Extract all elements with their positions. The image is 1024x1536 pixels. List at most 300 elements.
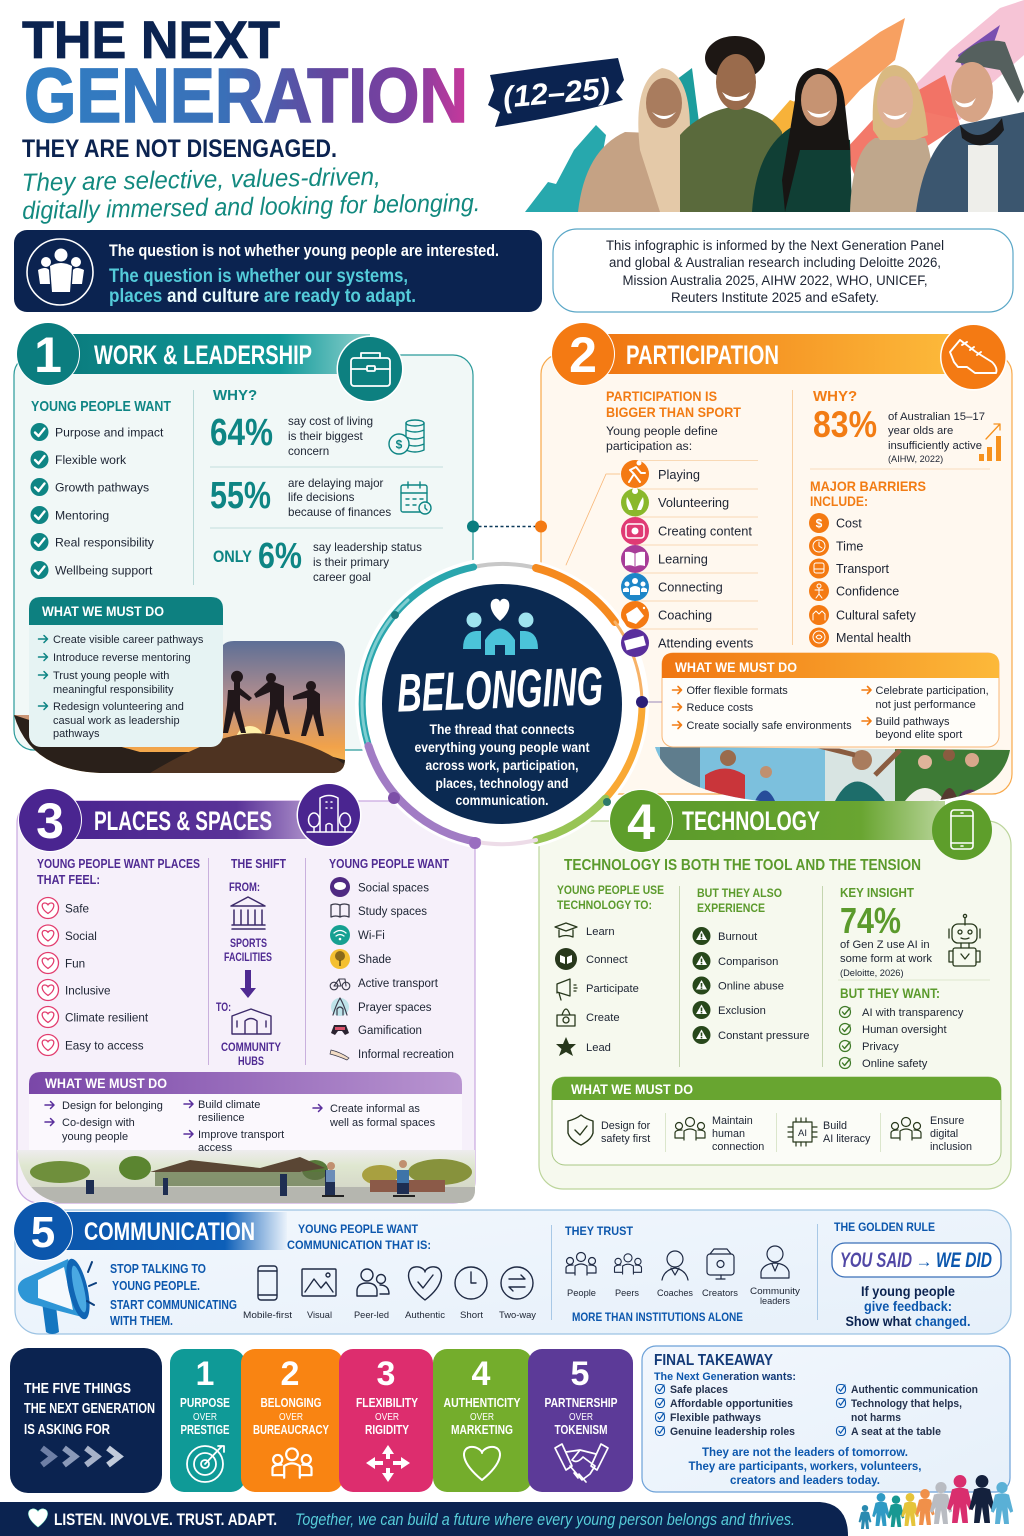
card 4: authenticity: OVER	[470, 1411, 494, 1423]
list: places that feel	[37, 856, 200, 1056]
what we must do: technology: safety first	[601, 1133, 650, 1145]
list: young people want spaces: Prayer spaces	[358, 1002, 432, 1014]
key insight: (Deloitte, 2026)	[840, 968, 904, 978]
what we must do: work: WHAT WE MUST DO	[42, 603, 164, 619]
they trust: Community	[750, 1286, 800, 1297]
final takeaway: Flexible pathways	[670, 1412, 761, 1424]
card 1: purpose: OVER	[193, 1411, 217, 1423]
sources box: Reuters Institute 2025 and eSafety.	[671, 290, 879, 305]
statistics: why	[210, 387, 443, 584]
golden rule	[832, 1220, 1001, 1329]
icon: chevrons	[42, 1448, 119, 1465]
what we must do: work: casual work as leadership	[53, 715, 180, 727]
list: places that feel: Fun	[65, 958, 85, 970]
card 3: flexibility: 3	[377, 1355, 395, 1393]
title	[22, 11, 468, 139]
what we must do: technology: connection	[712, 1141, 764, 1153]
list: also experience: Comparison	[718, 956, 778, 968]
key insight: 74%	[840, 900, 901, 941]
list: use technology to: Connect	[586, 954, 629, 966]
footer banner	[0, 1502, 848, 1536]
golden rule: give feedback:	[864, 1299, 952, 1314]
card 5: partnership: OVER	[569, 1411, 593, 1423]
ribbon header	[551, 322, 1007, 390]
final takeaway	[642, 1346, 1010, 1492]
ribbon header	[16, 322, 404, 402]
card 1: purpose: PRESTIGE	[180, 1422, 230, 1437]
question banner: places and culture are ready to adapt.	[109, 286, 416, 307]
list: also experience	[692, 886, 809, 1044]
what we must do: work: pathways	[53, 728, 100, 740]
what we must do: participation	[662, 653, 999, 747]
core circle: The thread that connects	[430, 722, 575, 737]
ribbon header: 3	[36, 793, 64, 849]
list: places that feel: THAT FEEL:	[37, 872, 100, 887]
card 5: partnership: PARTNERSHIP	[544, 1395, 618, 1410]
key insight: Human oversight	[862, 1024, 947, 1036]
they trust: Peers	[615, 1288, 639, 1299]
icon: digital inclusion	[891, 1118, 921, 1140]
what we must do: places: Create informal as	[330, 1103, 420, 1115]
what we must do: places: resilience	[198, 1112, 244, 1124]
statistics: why: is their primary	[313, 556, 389, 569]
what we must do: places: Co-design with	[62, 1117, 135, 1129]
what we must do: technology: human	[712, 1128, 745, 1140]
column: the shift: FROM:	[229, 882, 260, 894]
card 2: belonging: BELONGING	[260, 1395, 322, 1410]
column: bigger than sport	[566, 388, 758, 629]
key insight: KEY INSIGHT	[840, 886, 914, 900]
list: also experience: BUT THEY ALSO	[697, 886, 782, 900]
column: bigger than sport: Connecting	[658, 580, 723, 594]
ribbon header	[18, 782, 362, 852]
what we must do: technology: AI literacy	[823, 1133, 871, 1145]
tagline: They are selective, values-driven,	[22, 163, 381, 197]
column: the shift: HUBS	[238, 1056, 264, 1068]
communication qualities	[243, 1222, 536, 1321]
messaging: WITH THEM.	[110, 1314, 173, 1328]
column: bigger than sport: Learning	[658, 552, 708, 566]
icon: volunteering	[621, 488, 649, 516]
list: also experience: Exclusion	[718, 1005, 766, 1017]
question banner: The question is not whether young people are interested.	[109, 241, 499, 260]
list: young people want	[30, 398, 171, 579]
list: use technology to: Create	[586, 1012, 620, 1024]
messaging: START COMMUNICATING	[110, 1298, 237, 1312]
what we must do: places: access	[198, 1142, 233, 1154]
card 2: belonging: OVER	[279, 1411, 303, 1423]
list: major barriers	[809, 478, 926, 648]
column: the shift	[216, 857, 286, 1068]
list: use technology to	[555, 883, 664, 1056]
list: major barriers: INCLUDE:	[810, 493, 868, 509]
statistics: why: insufficiently active	[888, 440, 982, 452]
ribbon header: 5	[31, 1208, 55, 1257]
messaging	[110, 1262, 237, 1328]
they trust	[565, 1224, 800, 1324]
icon: coins: $	[396, 438, 403, 452]
card 5: partnership: TOKENISM	[554, 1422, 608, 1437]
footer banner: Together, we can build a future where every young person belongs and thrives.	[295, 1510, 795, 1529]
what we must do: technology: WHAT WE MUST DO	[571, 1081, 693, 1097]
final takeaway: Affordable opportunities	[670, 1398, 793, 1410]
what we must do: participation: WHAT WE MUST DO	[675, 659, 797, 675]
person 1 hijab	[578, 132, 660, 212]
list: major barriers: Transport	[836, 562, 890, 576]
photo: young people being active	[655, 745, 1010, 801]
they trust: THEY TRUST	[565, 1224, 634, 1238]
title: GENERATION	[24, 53, 468, 139]
what we must do: places: Design for belonging	[62, 1100, 163, 1112]
column: bigger than sport: BIGGER THAN SPORT	[606, 404, 741, 420]
statistics: why: career goal	[313, 571, 371, 584]
key insight	[838, 886, 990, 1070]
list: also experience: Burnout	[718, 931, 758, 943]
communication qualities: Authentic	[405, 1310, 445, 1321]
what we must do: participation: Offer flexible formats	[686, 685, 788, 697]
what we must do: technology: digital	[930, 1128, 958, 1140]
photo: silhouettes on a hill at sunset	[14, 641, 345, 773]
person 4 blonde	[850, 138, 933, 212]
list: places that feel: Inclusive	[65, 984, 110, 998]
key insight: Privacy	[862, 1041, 899, 1053]
what we must do: work: Trust young people with	[53, 670, 169, 682]
golden rule: →	[916, 1252, 932, 1271]
they trust: MORE THAN INSTITUTIONS ALONE	[572, 1310, 743, 1324]
icon: coins	[389, 420, 424, 454]
key insight: AI with transparency	[862, 1007, 964, 1019]
final takeaway: They are participants, workers, volunteers,	[688, 1459, 922, 1473]
final takeaway: Safe places	[670, 1384, 728, 1396]
statistics: why: 83%	[813, 404, 877, 445]
belonging hub	[355, 557, 662, 851]
list: major barriers: Cultural safety	[836, 608, 917, 622]
column: bigger than sport: PARTICIPATION IS	[606, 388, 717, 404]
list: young people want: YOUNG PEOPLE WANT	[31, 398, 171, 415]
statistics: why: of Australian 15–17	[888, 411, 985, 423]
what we must do: places: Build climate	[198, 1099, 260, 1111]
list: young people want: Wellbeing support	[55, 564, 153, 578]
five things panel: THE NEXT GENERATION	[24, 1400, 155, 1417]
statistics: why: is their biggest	[288, 430, 364, 443]
list: young people want spaces: Study spaces	[358, 906, 427, 918]
card 3: flexibility: FLEXIBILITY	[356, 1395, 418, 1410]
final takeaway: Technology that helps,	[851, 1398, 962, 1410]
what we must do: work: Create visible career pathways	[53, 634, 204, 646]
communication qualities: Visual	[307, 1310, 332, 1321]
list: places that feel: Climate resilient	[65, 1012, 149, 1024]
statistics: why	[810, 388, 1001, 469]
final takeaway: The Next Generation wants:	[654, 1371, 796, 1383]
core circle: places, technology and	[436, 776, 568, 791]
statistics: why: WHY?	[213, 387, 257, 404]
core circle: BELONGING	[396, 656, 604, 724]
list: major barriers: Cost	[836, 516, 862, 530]
list: major barriers: MAJOR BARRIERS	[810, 478, 926, 494]
panel: participation	[541, 322, 1012, 801]
statistics: why: concern	[288, 445, 329, 458]
list: use technology to: Participate	[586, 983, 639, 995]
sources box	[553, 229, 1013, 312]
communication qualities: Short	[460, 1310, 483, 1321]
photo: community park	[17, 1145, 475, 1203]
card 4: authenticity: MARKETING	[451, 1422, 513, 1437]
age range badge: (12–25)	[502, 72, 611, 115]
golden rule: THE GOLDEN RULE	[834, 1220, 935, 1234]
column: bigger than sport: Playing	[658, 467, 700, 482]
ribbon header: COMMUNICATION	[84, 1218, 255, 1246]
final takeaway: FINAL TAKEAWAY	[654, 1352, 774, 1369]
card 4: authenticity: AUTHENTICITY	[444, 1395, 521, 1410]
age range badge	[488, 58, 624, 127]
card 3: flexibility: RIGIDITY	[365, 1422, 409, 1437]
list: major barriers: Mental health	[836, 631, 911, 645]
subtitle: THEY ARE NOT DISENGAGED.	[22, 135, 337, 163]
list: use technology to: Lead	[586, 1042, 611, 1054]
communication qualities: COMMUNICATION THAT IS:	[287, 1238, 431, 1252]
list: use technology to: YOUNG PEOPLE USE	[557, 883, 664, 897]
they trust: Coaches	[657, 1288, 693, 1299]
list: places that feel: Easy to access	[65, 1040, 144, 1052]
what we must do: participation: Celebrate participation,	[876, 685, 989, 697]
what we must do: work: meaningful responsibility	[53, 684, 174, 696]
icon: people and heart	[463, 599, 538, 655]
statistics: why: ONLY	[213, 547, 253, 566]
they trust: Creators	[702, 1288, 738, 1299]
tagline	[22, 161, 480, 225]
list: young people want: Purpose and impact	[55, 426, 164, 440]
what we must do: technology: Ensure	[930, 1115, 964, 1127]
list: young people want spaces: Informal recreation	[358, 1049, 454, 1061]
list: major barriers: Confidence	[836, 584, 899, 598]
list: young people want spaces: Gamification	[358, 1025, 422, 1037]
card 2: belonging	[241, 1349, 343, 1492]
core circle: everything young people want	[414, 740, 590, 755]
statistics: why: life decisions	[288, 491, 355, 504]
ribbon header	[609, 789, 992, 860]
header photo: five young people with paint strokes	[525, 0, 1024, 212]
list: places that feel: Safe	[65, 902, 89, 916]
list: young people want spaces: Active transport	[358, 978, 439, 990]
subheading: TECHNOLOGY IS BOTH THE TOOL AND THE TENSION	[564, 857, 921, 874]
person 3	[752, 128, 852, 212]
panel: communication	[13, 1201, 1011, 1334]
five things panel	[10, 1348, 162, 1493]
communication qualities: Peer-led	[354, 1310, 389, 1321]
what we must do: participation: not just performance	[876, 699, 976, 711]
icon: attending events: Attending events	[658, 636, 753, 650]
column: bigger than sport: Coaching	[658, 608, 712, 622]
statistics: why: year olds are	[888, 425, 953, 437]
statistics: why: are delaying major	[288, 477, 384, 490]
panel: work and leadership	[14, 322, 473, 773]
statistics: why: WHY?	[813, 388, 857, 405]
what we must do: technology	[552, 1077, 1001, 1165]
list: places that feel: Social	[65, 930, 97, 943]
final takeaway: A seat at the table	[851, 1426, 941, 1438]
what we must do: technology: Design for	[601, 1120, 651, 1132]
statistics: why: say leadership status	[313, 541, 422, 554]
what we must do: places	[29, 1072, 462, 1154]
they trust: leaders	[760, 1296, 790, 1307]
final takeaway: Authentic communication	[851, 1384, 978, 1396]
column: the shift: COMMUNITY	[221, 1042, 281, 1054]
key insight: Online safety	[862, 1058, 928, 1070]
card 3: flexibility	[339, 1349, 433, 1492]
what we must do: participation: Create socially safe environments	[686, 720, 852, 732]
list: also experience: Constant pressure	[718, 1030, 809, 1042]
what we must do: participation: beyond elite sport	[876, 729, 962, 741]
what we must do: work	[29, 597, 223, 747]
what we must do: participation: Reduce costs	[686, 702, 754, 714]
icon: connecting	[621, 573, 649, 601]
title: THE NEXT	[22, 11, 280, 70]
final takeaway: They are not the leaders of tomorrow.	[702, 1445, 908, 1459]
card 5: partnership: 5	[571, 1355, 589, 1393]
what we must do: places: WHAT WE MUST DO	[45, 1075, 167, 1091]
what we must do: places: young people	[62, 1131, 128, 1143]
card 1: purpose: 1	[196, 1355, 214, 1393]
list: young people want spaces: Social spaces	[358, 882, 429, 894]
icon: calendar	[401, 482, 431, 514]
icon: bar chart with arrow	[979, 424, 1001, 461]
key insight: of Gen Z use AI in	[840, 939, 930, 951]
final takeaway: Genuine leadership roles	[670, 1426, 795, 1438]
list: young people want: Real responsibility	[55, 536, 155, 550]
card 1: purpose: PURPOSE	[180, 1395, 230, 1410]
icon: creating content	[621, 517, 649, 545]
column: the shift: FACILITIES	[224, 952, 272, 964]
panel: places and spaces	[17, 782, 475, 1203]
what we must do: places: Improve transport	[198, 1129, 284, 1141]
what we must do: work: Introduce reverse mentoring	[53, 652, 191, 664]
sources box: and global & Australian research including Deloitte 2026,	[609, 255, 941, 270]
core circle	[382, 584, 622, 824]
ribbon header: 2	[569, 327, 597, 383]
list: major barriers: Time	[836, 540, 863, 554]
icon: heart	[28, 1509, 48, 1527]
icon: AI chip	[788, 1118, 817, 1146]
connector: work to participation	[467, 520, 547, 532]
what we must do: work: Redesign volunteering and	[53, 701, 184, 713]
person 5 denim	[916, 112, 1024, 212]
ribbon header: TECHNOLOGY	[682, 806, 820, 836]
card 1: purpose	[170, 1349, 245, 1492]
final takeaway: creators and leaders today.	[730, 1473, 880, 1487]
column: bigger than sport: Young people define	[606, 424, 718, 438]
messaging: STOP TALKING TO	[110, 1262, 206, 1276]
icon: sports facility building	[231, 897, 265, 929]
list: use technology to: TECHNOLOGY TO:	[557, 898, 652, 912]
statistics: why: because of finances	[288, 506, 391, 519]
list: major barriers: $	[816, 516, 823, 530]
core circle: communication.	[456, 793, 548, 808]
list: also experience: EXPERIENCE	[697, 901, 765, 915]
question banner	[14, 230, 542, 312]
what we must do: technology: Build	[823, 1120, 847, 1132]
ribbon header: PARTICIPATION	[626, 340, 779, 370]
what we must do: technology: inclusion	[930, 1141, 972, 1153]
ribbon header: PLACES & SPACES	[94, 806, 272, 836]
they trust: People	[567, 1288, 596, 1299]
card 3: flexibility: OVER	[375, 1411, 399, 1423]
golden rule: Show what changed.	[846, 1314, 970, 1329]
person 2 hoodie	[680, 106, 782, 212]
list: young people want: Flexible work	[55, 453, 127, 467]
icon: coaching	[621, 601, 649, 629]
list: young people want: Mentoring	[55, 508, 109, 522]
golden rule: If young people	[861, 1284, 955, 1299]
golden rule: WE DID	[936, 1249, 992, 1272]
column: bigger than sport: Volunteering	[658, 495, 729, 510]
card 2: belonging: BUREAUCRACY	[253, 1422, 329, 1437]
column: bigger than sport: participation as:	[606, 439, 692, 453]
tagline: digitally immersed and looking for belonging.	[22, 189, 480, 225]
key insight: BUT THEY WANT:	[840, 986, 940, 1001]
statistics: why: say cost of living	[288, 415, 373, 428]
column: bigger than sport: Creating content	[658, 524, 752, 538]
statistics: why: 64%	[210, 412, 273, 454]
communication qualities: Two-way	[499, 1310, 536, 1321]
golden rule: YOU SAID	[840, 1249, 912, 1272]
messaging: YOUNG PEOPLE.	[112, 1279, 200, 1293]
communication qualities: Mobile-first	[243, 1310, 292, 1321]
list: also experience: Online abuse	[718, 980, 784, 992]
panel: technology	[539, 789, 1011, 1189]
icon: megaphone	[18, 1257, 96, 1334]
question banner: The question is whether our systems,	[109, 266, 408, 287]
communication qualities: YOUNG PEOPLE WANT	[298, 1222, 419, 1236]
key insight: some form at work	[840, 953, 932, 965]
column: the shift: TO:	[216, 1002, 231, 1014]
icon: shield	[568, 1115, 593, 1145]
card 5: partnership	[528, 1349, 633, 1492]
icon: robot	[949, 914, 980, 966]
card 4: authenticity	[433, 1349, 532, 1492]
five things panel: IS ASKING FOR	[24, 1421, 110, 1438]
statistics: why: 6%	[258, 535, 302, 576]
icon: human connection	[675, 1118, 705, 1140]
card 4: authenticity: 4	[472, 1355, 491, 1393]
list: young people want: Growth pathways	[55, 480, 149, 494]
list: young people want spaces: YOUNG PEOPLE WANT	[329, 857, 449, 871]
core circle: across work, participation,	[426, 758, 578, 773]
icon: playing	[621, 460, 649, 488]
what we must do: places: well as formal spaces	[329, 1117, 436, 1129]
icon: learning	[621, 545, 649, 573]
arrow: from to	[240, 970, 256, 998]
list: young people want spaces: Shade	[358, 954, 391, 966]
what we must do: technology: AI	[798, 1128, 807, 1139]
sources box: This infographic is informed by the Next Generation Panel	[606, 238, 944, 253]
what we must do: technology: Maintain	[712, 1115, 753, 1127]
ribbon header	[13, 1201, 287, 1261]
five things panel: THE FIVE THINGS	[24, 1380, 131, 1397]
statistics: why: 55%	[210, 475, 271, 517]
card 2: belonging: 2	[281, 1355, 299, 1393]
list: young people want spaces: Wi-Fi	[358, 930, 385, 942]
ring: multicolour brush thread	[362, 564, 642, 844]
column: the shift: SPORTS	[230, 938, 267, 950]
list: use technology to: Learn	[586, 926, 615, 938]
ribbon header: 4	[627, 794, 655, 850]
ribbon header: WORK & LEADERSHIP	[94, 340, 312, 370]
icon: people group	[27, 239, 93, 305]
column: the shift: THE SHIFT	[231, 857, 286, 871]
list: places that feel: YOUNG PEOPLE WANT PLACES	[37, 856, 200, 871]
what we must do: participation: Build pathways	[876, 716, 950, 728]
list: young people want spaces	[329, 857, 454, 1061]
